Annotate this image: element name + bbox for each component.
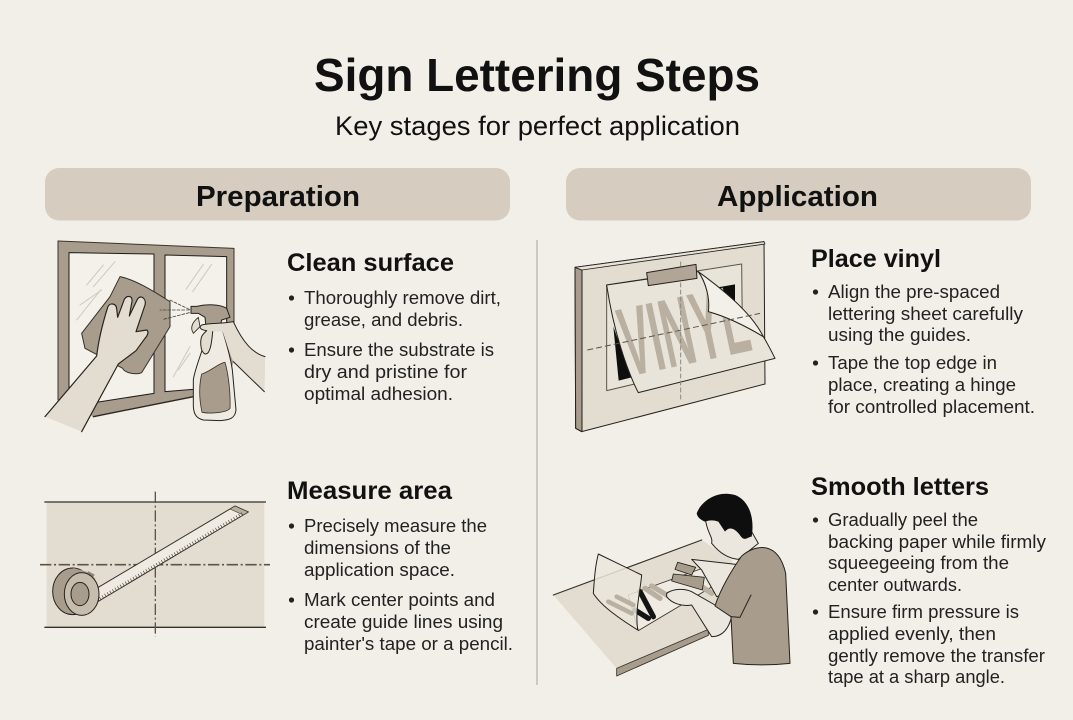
text block: Smooth letters: backing paper while firmly (828, 532, 1046, 552)
masking tape (647, 264, 697, 286)
text block: Place vinyl: Place vinyl (811, 245, 941, 273)
text block: Smooth letters: squeegeeing from the (828, 553, 1009, 573)
text block: Measure area (287, 477, 513, 654)
text block: Clean surface (287, 249, 501, 404)
window frame (58, 241, 234, 417)
text block: Place vinyl: using the guides. (828, 325, 971, 345)
transfer sheet: VINYL (610, 265, 758, 398)
measuring tape (97, 506, 248, 601)
table (553, 540, 732, 676)
text block: Measure area: Measure area (287, 477, 453, 505)
vinyl sheet on table (628, 567, 723, 631)
application area (44, 502, 266, 627)
title: Sign Lettering Steps (314, 49, 760, 101)
icon: tape measure on marked area (40, 492, 270, 637)
heading: Application: Application (717, 181, 878, 213)
squeegee (672, 562, 704, 590)
letters under the sheet (613, 284, 735, 381)
text block: Place vinyl: place, creating a hinge (828, 375, 1016, 395)
center guide lines (40, 492, 270, 637)
text block: Smooth letters: gently remove the transfer (828, 646, 1045, 666)
subtitle: Key stages for perfect application (335, 111, 740, 141)
text block: Measure area: application space. (304, 560, 455, 580)
text block: Measure area: painter's tape or a pencil. (304, 634, 513, 654)
shirt (715, 548, 790, 665)
hand holding bottle (200, 322, 265, 392)
text block: Measure area: Precisely measure the (304, 516, 487, 536)
heading: Application (566, 168, 1031, 220)
text block: Smooth letters: center outwards. (828, 575, 962, 595)
text block: Clean surface: dry and pristine for (304, 362, 467, 382)
heading: Preparation: Preparation (196, 181, 360, 213)
board (575, 242, 765, 432)
text block: Smooth letters: applied evenly, then (828, 624, 996, 644)
peeled corner (698, 272, 763, 337)
hand with cloth (45, 296, 148, 432)
text block: Smooth letters: Gradually peel the (828, 510, 978, 530)
text block: Measure area: dimensions of the (304, 538, 451, 558)
spray mist (160, 299, 189, 319)
text block: Smooth letters (811, 473, 1046, 687)
peeled backing (593, 554, 642, 630)
text block: Smooth letters: Smooth letters (811, 473, 989, 501)
text block: Clean surface: Ensure the substrate is (304, 340, 494, 360)
text block: Clean surface: Clean surface (287, 249, 454, 277)
hair (697, 494, 753, 539)
text block: Measure area: Mark center points and (304, 590, 495, 610)
guide lines (587, 262, 760, 402)
text block: Measure area: create guide lines using (304, 612, 503, 632)
text block: Smooth letters: Ensure firm pressure is (828, 602, 1019, 622)
person arms and head (667, 517, 758, 637)
text block: Smooth letters: tape at a sharp angle. (828, 667, 1005, 687)
text block: Clean surface: grease, and debris. (304, 310, 463, 330)
spray bottle (191, 305, 236, 421)
icon: vinyl sheet taped to a board (575, 242, 775, 432)
icon: person squeegeeing letters on a table (553, 494, 790, 676)
text block: Place vinyl: lettering sheet carefully (828, 304, 1023, 324)
tape body (53, 568, 99, 615)
text block: Place vinyl (811, 245, 1035, 417)
text block: Clean surface: Thoroughly remove dirt, (304, 288, 501, 308)
text block: Clean surface: optimal adhesion. (304, 384, 453, 404)
text block: Place vinyl: Tape the top edge in (828, 353, 997, 373)
heading: Preparation (45, 168, 510, 220)
cloth (82, 277, 170, 374)
icon: cleaning window with cloth and spray bottle (45, 241, 265, 432)
text block: Place vinyl: Align the pre-spaced (828, 282, 1000, 302)
text block: Place vinyl: for controlled placement. (828, 397, 1035, 417)
